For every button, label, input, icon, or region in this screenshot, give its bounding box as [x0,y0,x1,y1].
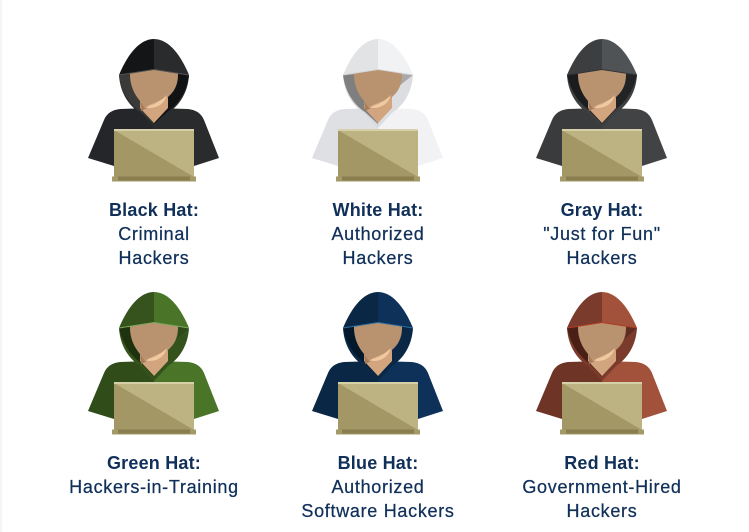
heading: black hat: Black Hat: [109,200,199,220]
panel: red hat [522,292,682,521]
icon: black hat hacker [88,39,219,182]
panel: gray hat [536,39,667,268]
panel: black hat [88,39,219,268]
text: government-hired hackers: Government-Hired [522,477,682,497]
text: criminal hackers: Hackers [119,248,189,268]
heading: green hat: Green Hat: [107,453,201,473]
icon: red hat hacker [536,292,667,434]
icon: gray hat hacker [536,39,667,182]
text: authorized software hackers: Software Hackers [301,501,455,521]
text: government-hired hackers: Hackers [567,501,637,521]
panel: green hat [69,292,239,497]
text: hackers in training: Hackers-in-Training [69,477,239,497]
text: authorized hackers: Authorized [331,224,425,244]
text: just for fun hackers: "Just for Fun" [543,224,661,244]
icon: blue hat hacker [312,292,443,434]
icon: white hat hacker [312,39,443,182]
heading: white hat: White Hat: [332,200,424,220]
text: just for fun hackers: Hackers [567,248,637,268]
panel: white hat [312,39,443,268]
icon: green hat hacker [88,292,219,434]
text: criminal hackers: Criminal [118,224,190,244]
text: authorized hackers: Hackers [343,248,413,268]
heading: blue hat: Blue Hat: [338,453,418,473]
heading: red hat: Red Hat: [564,453,640,473]
panel: blue hat [301,292,455,521]
heading: gray hat: Gray Hat: [561,200,643,220]
text: authorized software hackers: Authorized [331,477,425,497]
